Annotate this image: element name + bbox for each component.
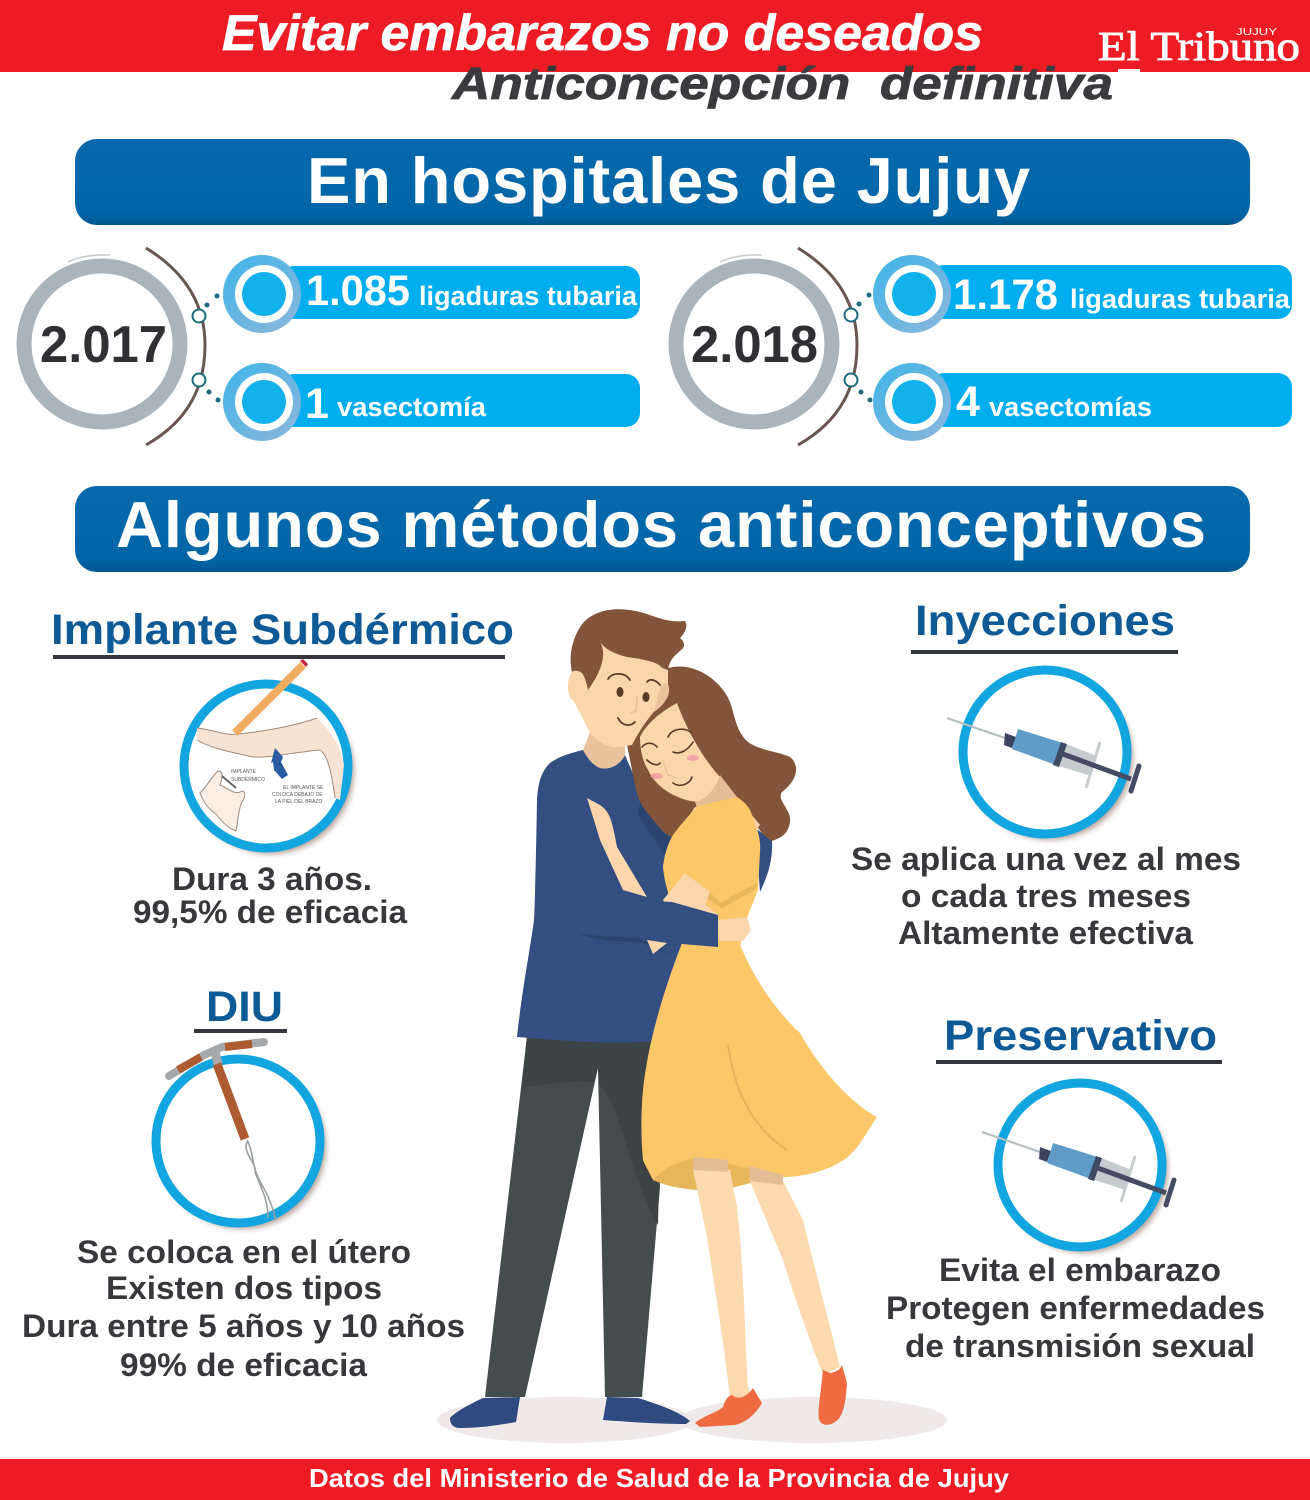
stat bar: 1.085 ligaduras tubaria [223, 255, 640, 333]
logo: El Tribuno Jujuy: JUJUY [1236, 27, 1277, 38]
description: Existen dos tipos [106, 1270, 382, 1306]
stat bar: 1.178 ligaduras tubaria [873, 255, 1292, 333]
footer band: Datos del Ministerio de Salud de la Provincia de Jujuy [309, 1463, 1010, 1493]
stat bar: 1 vasectomía [223, 363, 640, 441]
illustration: embracing couple [437, 609, 947, 1443]
panel: stats 2018 [676, 248, 1292, 445]
man face details [608, 674, 660, 725]
woman legs [693, 1170, 840, 1400]
header band [0, 0, 1310, 74]
description: 99% de eficacia [120, 1347, 367, 1383]
heading banner: En hospitales de Jujuy [75, 139, 1250, 225]
stat bar: 1 vasectomía: 1 [305, 380, 329, 428]
panel: stats 2017 [24, 248, 640, 445]
dress bodice [663, 797, 760, 947]
description: Protegen enfermedades [886, 1290, 1265, 1326]
stat bar: 4 vasectomías: 4 [956, 378, 980, 426]
man sweater [517, 750, 700, 1043]
heading: Preservativo [944, 1012, 1217, 1060]
logo: El Tribuno Jujuy: El Tribuno [1098, 23, 1300, 69]
description: Dura 3 años. [172, 861, 372, 897]
description: Se coloca en el útero [77, 1234, 411, 1270]
man forearm and hand [640, 900, 718, 947]
icon: implant illustration [184, 659, 354, 854]
year ring 2018: 2.018 [691, 316, 818, 374]
heading banner: En hospitales de Jujuy: En hospitales de Jujuy [307, 144, 1030, 217]
icon: implant illustration: LA PIEL DEL BRAZO [275, 799, 323, 805]
description: 99,5% de eficacia [133, 894, 407, 930]
stat bar: 1 vasectomía: vasectomía [337, 392, 487, 422]
heading: Inyecciones [915, 597, 1175, 645]
title: Evitar embarazos no deseados [222, 5, 983, 61]
icon: implant illustration: SUBDÉRMICO [231, 776, 265, 783]
man sweater far arm [755, 828, 772, 892]
icon: syringe [947, 670, 1139, 840]
footer band [0, 1459, 1310, 1500]
woman shoes [695, 1365, 847, 1427]
panel: inyecciones [851, 597, 1241, 951]
woman arm on chest [587, 798, 647, 897]
heading: Implante Subdérmico [51, 606, 514, 654]
icon: syringe [982, 1083, 1174, 1253]
icon: implant illustration: COLOCA DEBAJO DE [272, 792, 323, 798]
stat bar: 1.178 ligaduras tubaria: ligaduras tubaria [1070, 284, 1291, 314]
description: Evita el embarazo [939, 1252, 1221, 1288]
description: o cada tres meses [901, 878, 1191, 914]
woman hair back [627, 667, 796, 841]
man shoes [450, 1397, 690, 1428]
panel: implante subdermico [51, 606, 514, 930]
subtitle: Anticoncepción definitiva [451, 58, 1113, 109]
description [133, 861, 407, 930]
man head [568, 640, 668, 747]
panel: preservativo [886, 1012, 1265, 1364]
description [22, 1234, 465, 1383]
man neck [583, 732, 625, 768]
year ring 2017: 2.017 [40, 316, 167, 374]
heading banner: Algunos métodos anticonceptivos: Algunos métodos anticonceptivos [116, 488, 1206, 561]
description: Se aplica una vez al mes [851, 841, 1241, 877]
year ring 2018 [676, 248, 857, 445]
icon: implant illustration: EL IMPLANTE SE [283, 785, 324, 791]
connector dots [844, 292, 872, 402]
stat bar: 1.085 ligaduras tubaria: ligaduras tubaria [419, 281, 638, 311]
description: Dura entre 5 años y 10 años [22, 1308, 465, 1344]
icon: IUD [156, 1042, 326, 1229]
description: Altamente efectiva [898, 915, 1193, 951]
icon: implant illustration: IMPLANTE [231, 769, 257, 775]
man hair [571, 609, 686, 690]
description [886, 1252, 1265, 1364]
stat bar: 4 vasectomías [873, 363, 1292, 441]
year ring 2017 [24, 248, 205, 445]
woman arm [663, 873, 720, 916]
heading: DIU [206, 983, 283, 1031]
panel: DIU [22, 983, 465, 1383]
description: de transmisión sexual [905, 1328, 1255, 1364]
ground shadows [437, 1397, 947, 1443]
woman face details [642, 729, 693, 785]
connector dots [192, 294, 220, 402]
man trousers [485, 1036, 662, 1397]
stat bar: 4 vasectomías: vasectomías [989, 392, 1152, 422]
stat bar: 1.085 ligaduras tubaria: 1.085 [306, 267, 410, 315]
woman face [640, 703, 722, 802]
dress skirt [641, 943, 877, 1191]
description [851, 841, 1241, 951]
stat bar: 1.178 ligaduras tubaria: 1.178 [953, 271, 1058, 319]
